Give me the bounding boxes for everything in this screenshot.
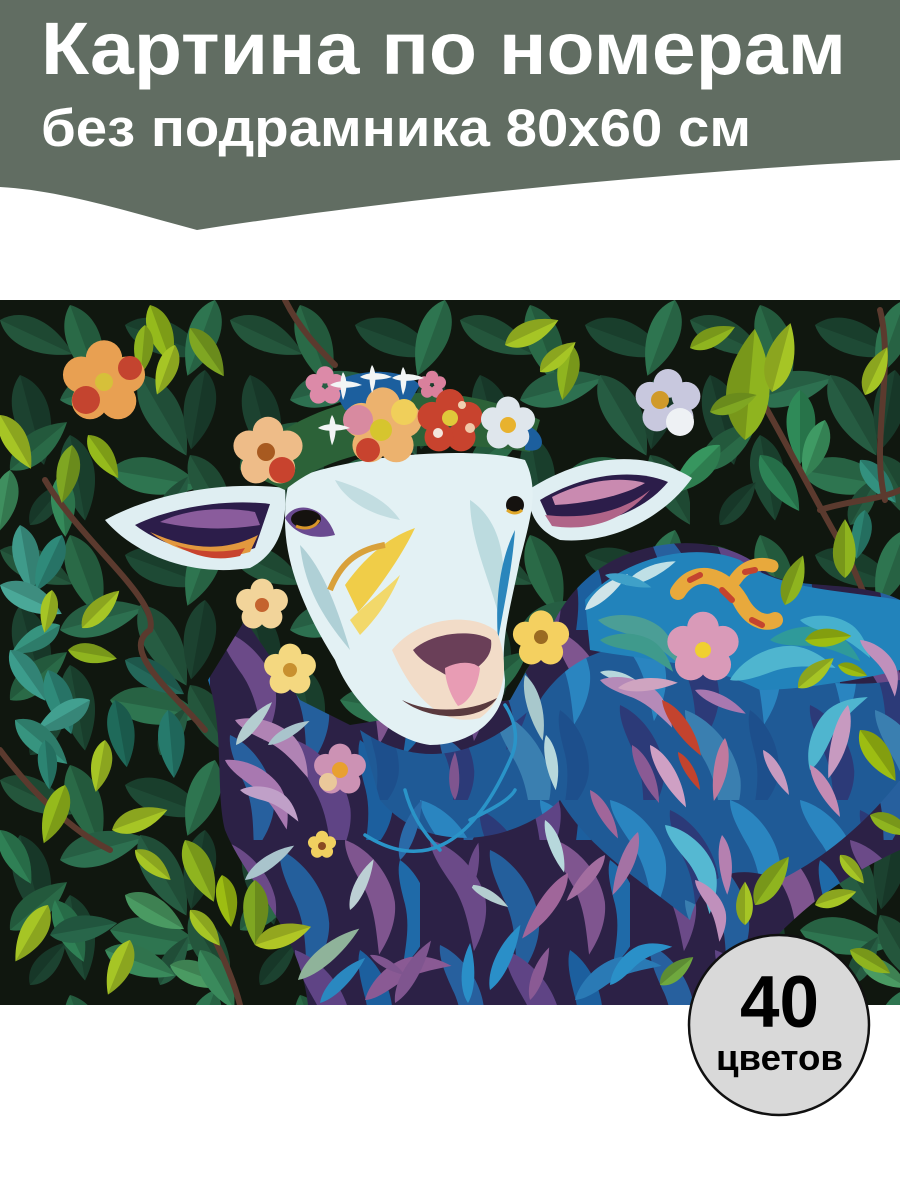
flower: orange patterned crescents: [678, 564, 775, 625]
subtitle: без подрамника 80х60 см: [41, 99, 751, 158]
header banner: [0, 0, 900, 230]
flower: pink small: [306, 366, 344, 404]
foliage: bright green leaves: [0, 301, 900, 999]
badge: 40 colours: [689, 935, 869, 1115]
wool strokes: pink and purple: [516, 634, 900, 944]
flower: red: [418, 389, 482, 451]
sheep head: [285, 453, 533, 745]
muzzle: [392, 620, 504, 720]
nose: [413, 633, 492, 675]
yellow cheek streaks: [345, 528, 415, 612]
wool: blue middle: [360, 645, 900, 920]
blue twig in wool: [365, 705, 515, 851]
dense foliage background: [0, 300, 900, 1005]
flower: small yellow: [308, 831, 336, 858]
sheep ears: [105, 459, 692, 570]
number of colours: 40: [740, 962, 819, 1043]
flower: peach left: [233, 417, 303, 483]
flower: pink lower: [314, 744, 366, 794]
flower crown: [233, 365, 542, 490]
foliage: mid green leaves: [0, 390, 900, 1015]
foliage: teal leaves, left: [0, 453, 900, 790]
flower: pink: [667, 612, 739, 680]
flower: top left orange: [63, 340, 145, 419]
mouth: [402, 698, 497, 716]
title: Картина по номерам: [41, 7, 846, 90]
eye left: [285, 508, 335, 537]
wool strokes: lower left: [225, 702, 672, 1003]
flower: peach centre: [343, 387, 422, 462]
flower: top right white: [636, 369, 700, 436]
wool body: [208, 543, 900, 1023]
painting: sheep in flowers: [0, 300, 900, 1023]
branches: [0, 300, 900, 1005]
wool: upper teal zone: [585, 552, 900, 690]
badge caption: цветов: [716, 1037, 843, 1078]
eye right: [506, 496, 524, 514]
flower: white right: [481, 396, 535, 448]
flower: small white stars: [318, 365, 424, 445]
flower: left of face bottom: [264, 644, 316, 694]
flowers beside the wool: [236, 564, 775, 858]
flower: yellow right of muzzle: [513, 610, 569, 664]
wool strokes: red: [662, 700, 701, 790]
face shading: [300, 545, 350, 650]
flower: left of face top: [236, 579, 288, 629]
wool strokes: teal and pale: [468, 555, 876, 914]
flowers in foliage: [63, 340, 700, 436]
